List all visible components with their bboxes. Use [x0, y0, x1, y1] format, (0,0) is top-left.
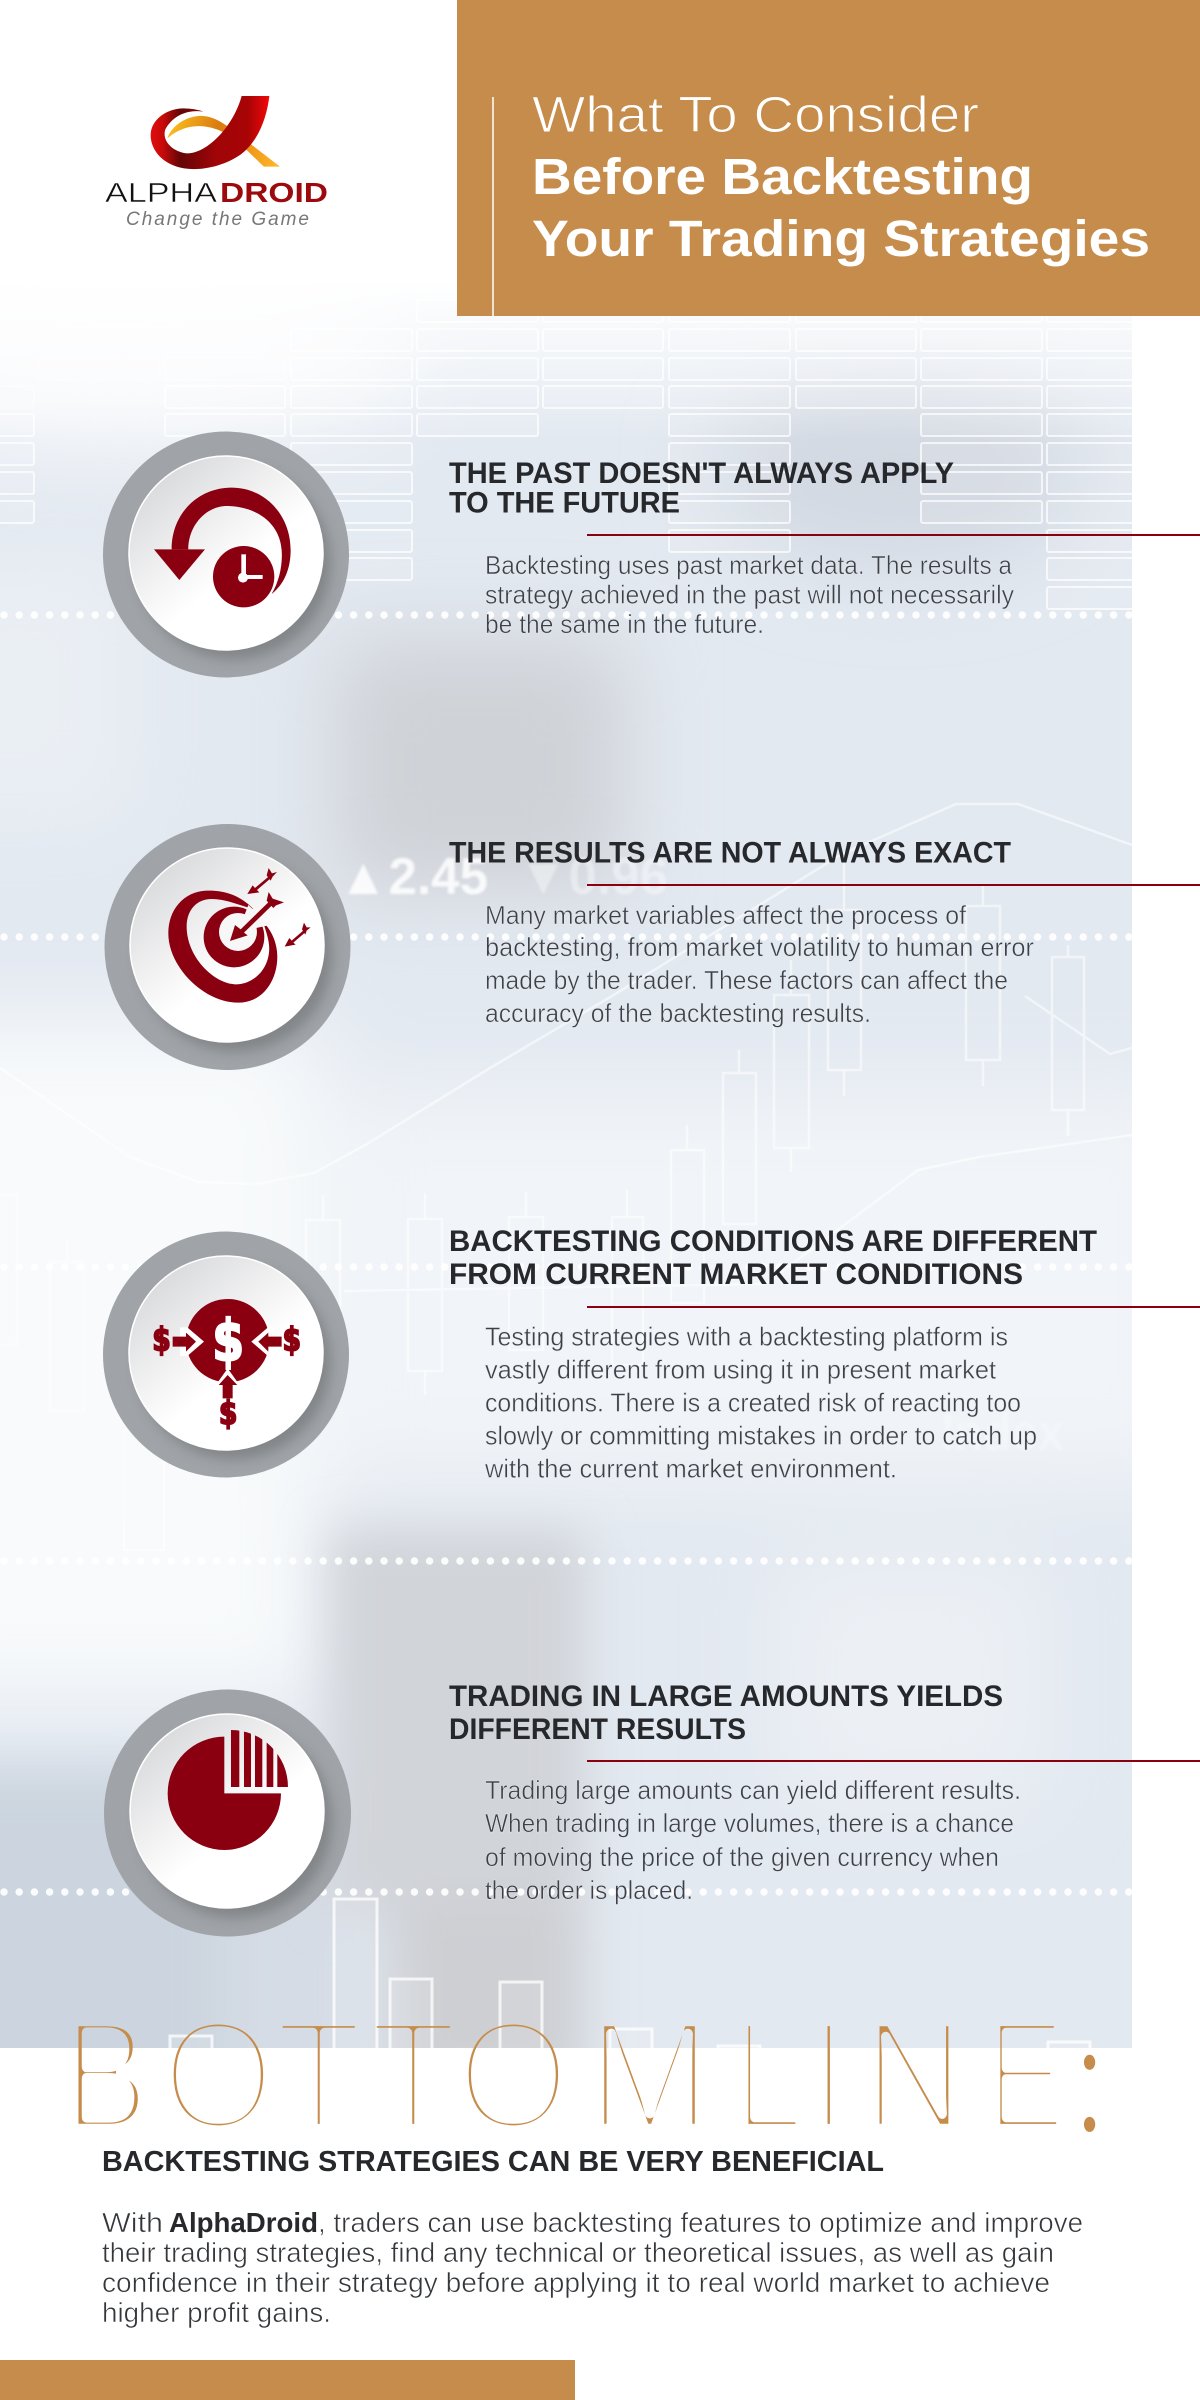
icon: pie with striped slice — [168, 1727, 288, 1850]
bottom line heading: T — [274, 1988, 364, 2163]
point 1 text — [449, 457, 1200, 639]
body — [485, 1775, 1021, 1905]
conclusion paragraph: their trading strategies, find any technical or theoretical issues, as well as gain — [102, 2237, 1054, 2268]
heading: BACKTESTING CONDITIONS ARE DIFFERENT — [449, 1225, 1097, 1258]
heading: TO THE FUTURE — [449, 486, 680, 520]
heading: DIFFERENT RESULTS — [449, 1713, 746, 1746]
conclusion paragraph: confidence in their strategy before applying it to real world market to achieve — [102, 2267, 1050, 2298]
body — [485, 550, 1014, 639]
heading — [449, 457, 954, 520]
title: What To Consider — [532, 86, 979, 143]
body: Many market variables affect the process of — [485, 900, 967, 930]
wordmark: DROID — [220, 177, 328, 208]
bottom line heading: T — [368, 1987, 459, 2163]
body: be the same in the future. — [485, 609, 764, 639]
bottom bars of the chart — [168, 1898, 1092, 2048]
icon disc 4: pie chart — [104, 1690, 351, 1936]
body: backtesting, from market volatility to human error — [485, 932, 1034, 962]
heading — [449, 1225, 1097, 1291]
body — [484, 1322, 1037, 1484]
footer bar — [0, 2360, 575, 2400]
body: with the current market environment. — [484, 1454, 897, 1484]
logo — [105, 96, 328, 230]
icon: converging dollars: $ — [283, 1321, 301, 1359]
body: slowly or committing mistakes in order to catch up — [485, 1420, 1037, 1450]
faint ticker text: ▲2.45 — [338, 848, 488, 906]
bottom line heading: B — [64, 1987, 149, 2163]
conclusion paragraph: With — [102, 2207, 163, 2238]
conclusion paragraph — [102, 2207, 1083, 2328]
bottom line heading: M — [587, 1987, 712, 2163]
heading: THE RESULTS ARE NOT ALWAYS EXACT — [449, 836, 1011, 870]
body: Testing strategies with a backtesting platform is — [485, 1322, 1008, 1352]
icon disc 1: past and clock — [103, 432, 349, 678]
point 4 text — [449, 1680, 1200, 1905]
bottom line heading: L — [732, 1986, 805, 2163]
header banner — [457, 0, 1200, 316]
title: Your Trading Strategies — [532, 210, 1150, 267]
tagline: Change the Game — [126, 209, 309, 230]
icon: converging dollars: $ — [219, 1394, 237, 1432]
heading: THE PAST DOESN'T ALWAYS APPLY — [449, 457, 954, 490]
body: vastly different from using it in present market — [485, 1354, 997, 1384]
heading — [449, 1680, 1003, 1746]
body: Trading large amounts can yield different results. — [485, 1775, 1021, 1805]
conclusion paragraph: higher profit gains. — [102, 2297, 331, 2328]
body — [485, 900, 1034, 1028]
bottom line heading: : — [1072, 1980, 1107, 2169]
bottom line heading: O — [161, 1988, 276, 2163]
icon disc 3: dollars — [103, 1232, 349, 1478]
faint ticker text — [348, 857, 666, 895]
conclusion paragraph: AlphaDroid — [169, 2207, 318, 2238]
body: of moving the price of the given currency when — [485, 1842, 999, 1872]
body: Backtesting uses past market data. The results a — [485, 550, 1012, 580]
heading: FROM CURRENT MARKET CONDITIONS — [449, 1258, 1023, 1291]
body: the order is placed. — [485, 1875, 693, 1905]
dotted lines — [4, 615, 1132, 1892]
title — [532, 86, 1150, 267]
wordmark — [105, 177, 328, 208]
grid of table cells — [0, 337, 1132, 610]
chart lines and candlesticks — [352, 803, 1132, 1173]
bottom line heading: O — [456, 1988, 571, 2163]
bottom line heading: N — [863, 1987, 965, 2163]
icon: converging dollars: $ — [152, 1321, 171, 1359]
bottom line heading: I — [807, 1988, 851, 2163]
icon: converging dollars: $ — [212, 1309, 244, 1375]
icon: rewind arrow and clock — [154, 488, 291, 607]
faint ticker text: ▼0.96 — [518, 848, 668, 906]
bottom line heading: E — [985, 1987, 1066, 2163]
point 2 text — [449, 836, 1200, 1028]
icon: target with arrows — [168, 868, 311, 1003]
icon disc 2: target — [104, 824, 350, 1070]
body: When trading in large volumes, there is a chance — [485, 1808, 1014, 1838]
body: accuracy of the backtesting results. — [485, 998, 871, 1028]
body: made by the trader. These factors can affect the — [485, 965, 1008, 995]
conclusion paragraph: , traders can use backtesting features to optimize and improve — [318, 2207, 1083, 2238]
point 3 text — [449, 1225, 1200, 1484]
title: Before Backtesting — [532, 148, 1033, 205]
bottom line heading — [78, 2024, 1096, 2132]
heading: TRADING IN LARGE AMOUNTS YIELDS — [449, 1680, 1003, 1713]
body: conditions. There is a created risk of reacting too — [485, 1388, 1021, 1418]
body: strategy achieved in the past will not necessarily — [485, 580, 1014, 610]
icon: swoosh — [151, 96, 280, 169]
background photo panel — [0, 250, 1200, 2120]
faint ticker text: Index — [941, 1404, 1064, 1462]
icon: converging dollars — [152, 1299, 301, 1432]
conclusion subheading: BACKTESTING STRATEGIES CAN BE VERY BENEFICIAL — [102, 2146, 884, 2178]
wordmark: ALPHA — [105, 177, 218, 208]
